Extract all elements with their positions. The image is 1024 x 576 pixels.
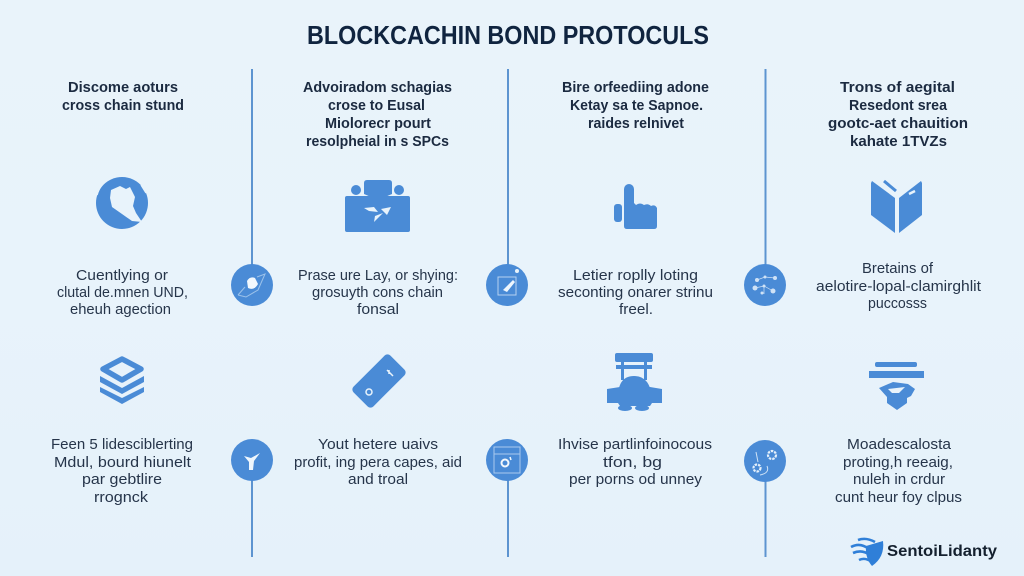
text block: row 1 column 2: Prase ure Lay, or shying:	[298, 267, 458, 284]
icon: pointing hand	[614, 184, 657, 229]
heading: column 3: Bire orfeediing adone	[562, 80, 709, 96]
text block: row 1 column 2: grosuyth cons chain	[312, 284, 443, 301]
heading: column 4: gootc-aet chauition	[828, 116, 968, 132]
title: BLOCKCACHIN BOND PROTOCULS	[307, 20, 709, 50]
text block: row 1 column 1	[57, 267, 188, 318]
text block: row 1 column 4: aelotire-lopal-clamirghlit	[816, 278, 982, 295]
heading: column 2: Advoiradom schagias	[303, 80, 452, 96]
text block: row 1 column 4: Bretains of	[862, 260, 934, 277]
text block: row 1 column 4	[816, 260, 982, 312]
heading: column 2: resolpheial in s SPCs	[306, 134, 449, 150]
text block: row 2 column 1: rrognck	[94, 489, 149, 506]
text block: row 2 column 4: proting,h reeaig,	[843, 454, 953, 471]
step badge 2	[486, 264, 528, 306]
text block: row 1 column 2: fonsal	[357, 301, 399, 318]
text block: row 1 column 1: clutal de.mnen UND,	[57, 284, 188, 301]
text block: row 2 column 1	[51, 436, 193, 506]
text block: row 2 column 2: and troal	[348, 471, 408, 488]
text block: row 1 column 3: freel.	[619, 301, 653, 318]
heading: column 2: Miolorecr pourt	[325, 116, 431, 132]
text block: row 1 column 4: puccosss	[868, 295, 927, 312]
text block: row 1 column 1: eheuh agection	[70, 301, 171, 318]
text block: row 2 column 4: Moadescalosta	[847, 436, 952, 453]
heading: column 4	[828, 80, 968, 150]
heading: column 1	[62, 80, 184, 114]
logo: SentoiLidanty: SentoiLidanty	[887, 543, 997, 560]
text block: row 2 column 3	[558, 436, 712, 488]
icon: rotated tag card	[351, 353, 407, 409]
heading: column 3	[562, 80, 709, 132]
icon: cart machine	[607, 353, 662, 411]
text block: row 2 column 4: cunt heur foy clpus	[835, 489, 962, 506]
heading: column 2: crose to Eusal	[328, 98, 425, 114]
icon: briefcase	[345, 180, 410, 232]
text block: row 1 column 1: Cuentlying or	[76, 267, 168, 284]
icon: funnel	[869, 362, 924, 410]
step badge 3	[744, 264, 786, 306]
heading: column 1: Discome aoturs	[68, 80, 178, 96]
text block: row 2 column 4	[835, 436, 962, 506]
text block: row 1 column 2	[298, 267, 458, 318]
step badge 5	[486, 439, 528, 481]
text block: row 2 column 3: Ihvise partlinfoinocous	[558, 436, 712, 453]
heading: column 1: cross chain stund	[62, 98, 184, 114]
timeline divider 1	[251, 69, 253, 557]
text block: row 2 column 2: profit, ing pera capes, aid	[294, 454, 462, 471]
logo: SentoiLidanty	[851, 539, 997, 566]
heading: column 3: Ketay sa te Sapnoe.	[570, 98, 703, 114]
icon: stacked layers	[100, 359, 144, 404]
heading: column 4: Trons of aegital	[840, 80, 955, 96]
text block: row 2 column 1: par gebtlire	[82, 471, 162, 488]
text block: row 2 column 3: per porns od unney	[569, 471, 703, 488]
text block: row 2 column 1: Feen 5 lidesciblerting	[51, 436, 193, 453]
heading: column 4: Resedont srea	[849, 98, 948, 114]
text block: row 2 column 4: nuleh in crdur	[853, 471, 945, 488]
text block: row 2 column 1: Mdul, bourd hiunelt	[54, 454, 192, 471]
step badge 6	[744, 440, 786, 482]
timeline divider 3	[764, 69, 766, 557]
text block: row 1 column 3: Letier roplly loting	[573, 267, 698, 284]
text block: row 1 column 3	[558, 267, 713, 318]
heading: column 3: raides relnivet	[588, 116, 684, 132]
timeline divider 2	[507, 69, 509, 557]
text block: row 2 column 2: Yout hetere uaivs	[318, 436, 438, 453]
text block: row 1 column 3: seconting onarer strinu	[558, 284, 713, 301]
icon: globe	[96, 177, 148, 229]
text block: row 2 column 2	[294, 436, 462, 488]
icon: open book	[871, 181, 922, 233]
heading: column 4: kahate 1TVZs	[850, 134, 947, 150]
step badge 4	[231, 439, 273, 481]
heading: column 2	[303, 80, 452, 150]
step badge 1	[231, 264, 273, 306]
text block: row 2 column 3: tfon, bg	[603, 454, 662, 471]
